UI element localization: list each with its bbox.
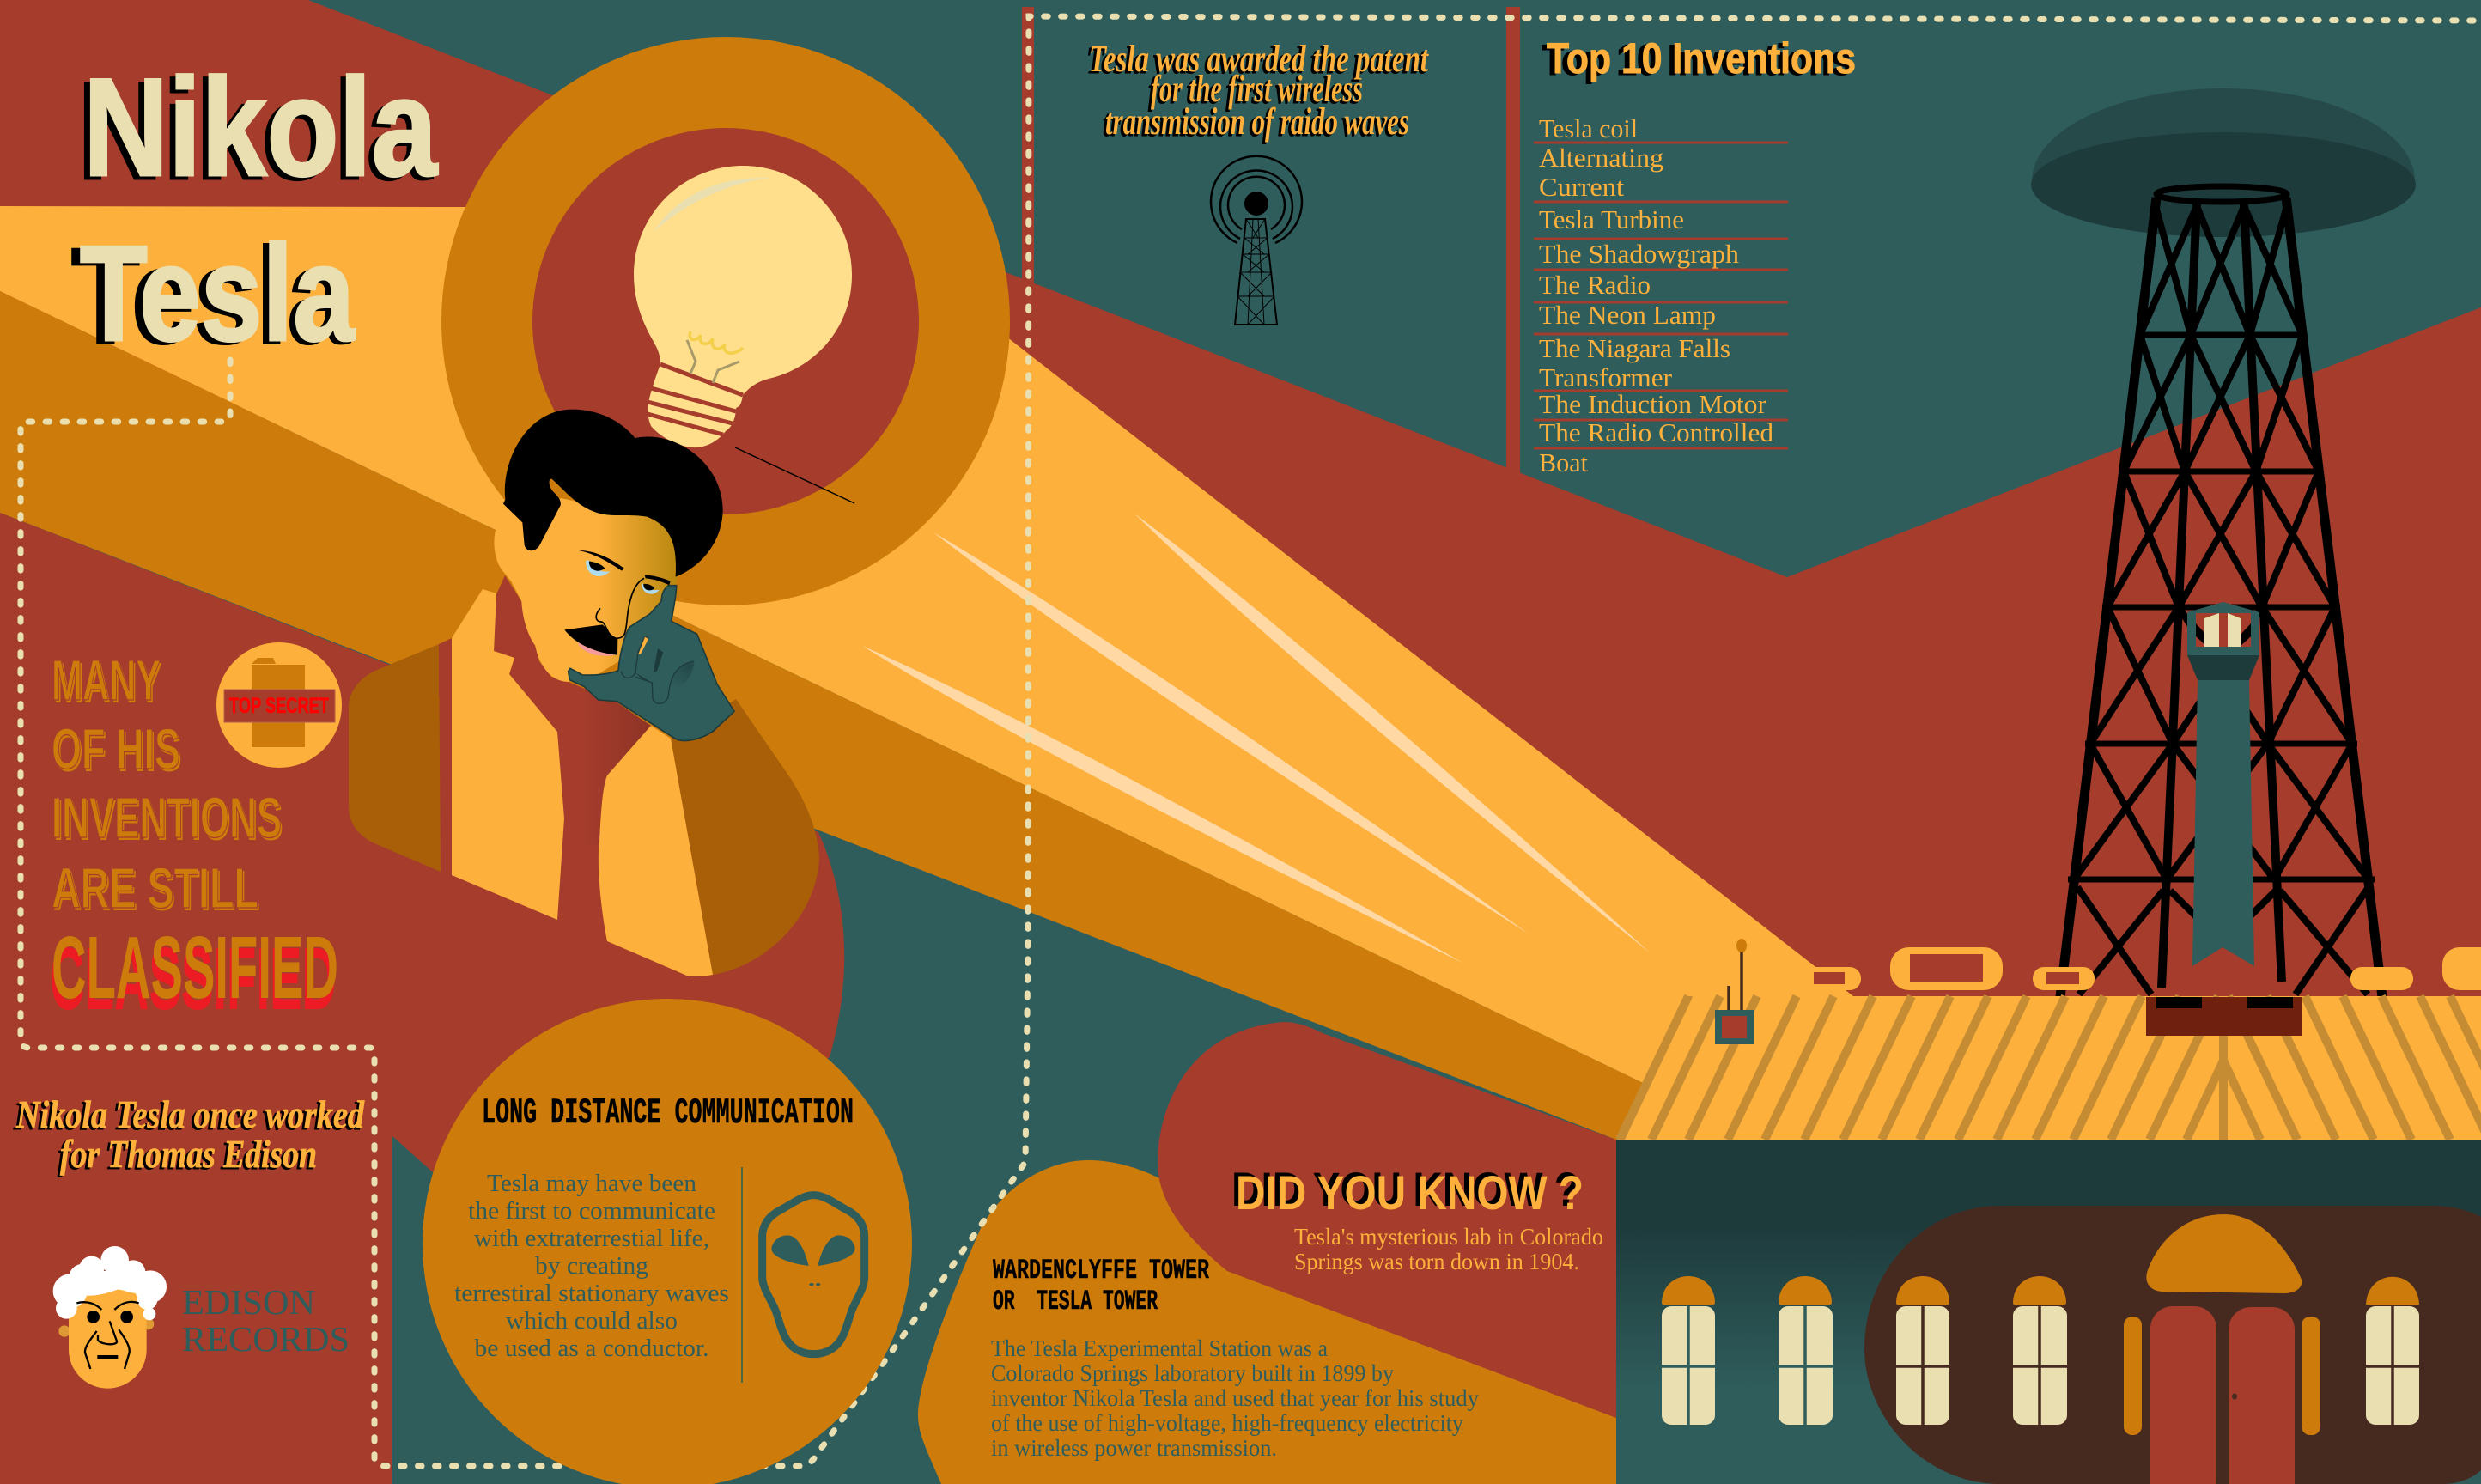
callout: wireless patent: Tesla was awarded the patent <box>1086 40 1426 82</box>
callout: wireless patent: transmission of raido waves <box>1103 102 1407 144</box>
collar and shirt <box>494 575 651 846</box>
background: did-you-know red lobe <box>1158 1022 1616 1418</box>
callout: worked for Edison: Nikola Tesla once worked <box>13 1094 362 1138</box>
heading: many of his inventions are still classified: MANY <box>53 651 162 715</box>
logotype: Edison Records: EDISON <box>182 1282 315 1322</box>
nose line <box>596 578 644 638</box>
heading: Top 10 Inventions: Top 10 Inventions <box>1542 36 1852 84</box>
background: yellow light beam <box>0 206 1853 1083</box>
logotype: Edison Records: RECORDS <box>182 1319 350 1359</box>
heading: many of his inventions are still classified <box>50 648 338 1028</box>
tower base <box>2146 997 2302 1036</box>
coat lapel left <box>452 589 564 920</box>
callout: wireless patent: for the first wireless <box>1148 70 1360 112</box>
list: top 10 inventions: The Radio <box>1539 270 1651 300</box>
window 5 <box>2366 1277 2419 1425</box>
lattice <box>2060 186 2382 997</box>
list: top 10 inventions: The Neon Lamp <box>1539 300 1716 330</box>
background: dark orange band <box>0 291 1643 1140</box>
callout: wireless patent: transmission of raido waves <box>1105 100 1409 143</box>
face <box>494 498 677 682</box>
callout: wireless patent: Tesla was awarded the patent <box>1089 38 1429 80</box>
thin black line <box>735 447 854 503</box>
list: top 10 inventions: Tesla Turbine <box>1539 204 1684 234</box>
coat left dark <box>349 644 441 872</box>
heading: many of his inventions are still classified: ARE STILL <box>52 856 258 921</box>
window 1 <box>1662 1276 1715 1425</box>
icon: top secret folder: TOP SECRET <box>229 694 329 718</box>
body text: extraterrestrial life: by creating <box>535 1252 648 1280</box>
text: Colorado Springs lab: Tesla's mysterious lab in Colorado <box>1294 1224 1603 1250</box>
body text: extraterrestrial life: terrestiral stationary waves <box>454 1280 729 1307</box>
eyes <box>586 561 611 576</box>
title: Tesla: Tesla <box>71 221 350 372</box>
callout: wireless patent <box>1086 38 1429 144</box>
text: Colorado Springs lab <box>1294 1224 1603 1274</box>
icon: Edison face <box>53 1246 167 1389</box>
body text: extraterrestrial life <box>454 1170 729 1362</box>
icon: alien head <box>763 1195 865 1354</box>
panel: long distance communication <box>423 999 912 1484</box>
body text: extraterrestrial life: with extraterrestial life, <box>474 1225 709 1252</box>
window 4 <box>2013 1276 2067 1425</box>
callout: worked for Edison: Nikola Tesla once worked <box>15 1092 365 1136</box>
heading: did you know: DID YOU KNOW ? <box>1231 1162 1579 1216</box>
heading: many of his inventions are still classified: MANY <box>52 648 161 713</box>
callout: wireless patent: for the first wireless <box>1151 68 1363 110</box>
list: top 10 inventions: Alternating <box>1539 143 1663 173</box>
heading: many of his inventions are still classified: CLASSIFIED <box>52 918 338 1017</box>
text: Colorado Springs lab: Springs was torn down in 1904. <box>1294 1249 1579 1274</box>
body text: extraterrestrial life: which could also <box>506 1307 678 1335</box>
heading: did you know: DID YOU KNOW ? <box>1236 1165 1584 1219</box>
body text: extraterrestrial life: Tesla may have been <box>487 1170 696 1197</box>
icon: light bulb <box>634 166 852 447</box>
door and dome <box>2124 1214 2320 1484</box>
text: Tesla Experimental Station: in wireless power transmission. <box>991 1435 1277 1461</box>
text: Tesla Experimental Station: The Tesla Experimental Station was a <box>991 1335 1328 1361</box>
heading: Wardenclyffe tower: OR TESLA TOWER <box>993 1286 1158 1317</box>
central column with lookout <box>2187 602 2259 966</box>
window 3 <box>1896 1276 1949 1425</box>
roof ornaments <box>1803 947 2481 990</box>
background: lower left red lobe <box>0 513 844 1484</box>
moustache <box>578 642 616 656</box>
heading: many of his inventions are still classified: ARE STILL <box>53 859 260 923</box>
heading: many of his inventions are still classified: OF HIS <box>53 720 182 784</box>
window 2 <box>1779 1276 1833 1425</box>
list: top 10 inventions: Boat <box>1539 447 1588 477</box>
list: top 10 inventions <box>1534 113 1788 477</box>
title: Nikola: Nikola <box>83 50 439 205</box>
coat right dark <box>671 699 819 975</box>
heading: many of his inventions are still classified: OF HIS <box>52 717 180 782</box>
building roof <box>1616 996 2481 1140</box>
title: Nikola: Nikola <box>77 53 434 209</box>
strip between coat panels <box>439 638 452 696</box>
building wall <box>1616 1140 2481 1484</box>
background: orange lobe lower centre <box>918 1160 1616 1484</box>
body text: extraterrestrial life: the first to communicate <box>468 1197 715 1225</box>
text: Tesla Experimental Station: of the use of high-voltage, high-frequency electricity <box>991 1410 1463 1436</box>
heading: long distance communication: LONG DISTANCE COMMUNICATION <box>482 1092 854 1134</box>
light streaks <box>862 514 1651 964</box>
roof antenna box <box>1715 939 1754 1044</box>
background: red field with chevron <box>0 0 2481 1031</box>
coat lapel right <box>599 726 713 976</box>
list: top 10 inventions: The Shadowgraph <box>1539 239 1740 269</box>
icon: top secret folder <box>216 642 342 768</box>
logotype: Edison Records <box>182 1282 350 1359</box>
list: top 10 inventions: Tesla coil <box>1539 113 1638 143</box>
heading: Wardenclyffe tower <box>993 1255 1210 1317</box>
text: Tesla Experimental Station <box>991 1335 1479 1461</box>
heading: Top 10 Inventions: Top 10 Inventions <box>1547 34 1856 82</box>
icon: radio tower <box>1211 156 1302 325</box>
list: top 10 inventions: Current <box>1539 172 1624 202</box>
illustration: Wardenclyffe tower <box>2031 88 2416 997</box>
text: Tesla Experimental Station: Colorado Springs laboratory built in 1899 by <box>991 1360 1394 1386</box>
dish <box>2031 88 2416 237</box>
list: top 10 inventions: Transformer <box>1539 362 1673 392</box>
illustration: Nikola Tesla portrait <box>349 410 819 976</box>
red vertical divider bars <box>1022 7 1520 475</box>
list: top 10 inventions: The Radio Controlled <box>1539 417 1774 447</box>
heading: many of his inventions are still classified: INVENTIONS <box>52 786 282 850</box>
heading: many of his inventions are still classified: INVENTIONS <box>53 788 283 853</box>
gloved hand <box>569 586 734 741</box>
list: top 10 inventions: The Niagara Falls <box>1539 333 1730 363</box>
callout: worked for Edison: for Thomas Edison <box>58 1134 314 1177</box>
list: top 10 inventions: The Induction Motor <box>1539 389 1767 419</box>
body text: extraterrestrial life: be used as a conductor. <box>474 1335 709 1362</box>
heading: many of his inventions are still classified: CLASSIFIED <box>50 929 337 1028</box>
ring behind bulb <box>441 37 1010 605</box>
heading: Wardenclyffe tower: WARDENCLYFFE TOWER <box>993 1255 1210 1286</box>
hair <box>503 410 723 577</box>
title: Tesla: Tesla <box>80 218 356 369</box>
brown entrance arch <box>1864 1206 2481 1484</box>
callout: worked for Edison: for Thomas Edison <box>60 1132 317 1176</box>
callout: worked for Edison <box>13 1092 365 1177</box>
text: Tesla Experimental Station: inventor Nikola Tesla and used that year for his study <box>991 1385 1479 1411</box>
